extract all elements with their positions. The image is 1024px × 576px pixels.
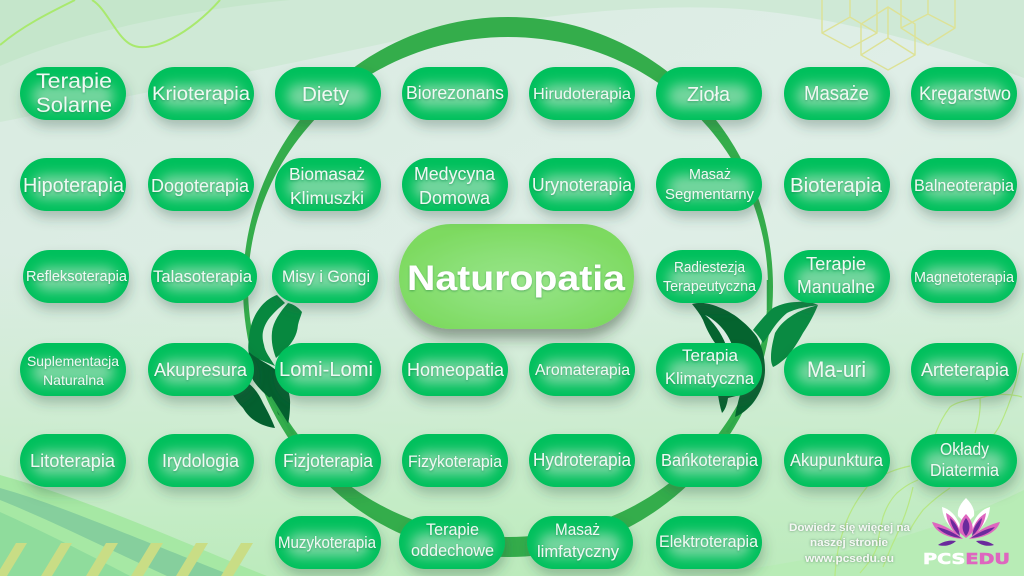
pill: Muzykoterapia: Muzykoterapia [278, 534, 377, 552]
pill: Biomasaż Klimuszki: Klimuszki [290, 188, 364, 208]
pill: Fizykoterapia [402, 434, 508, 487]
pill: Radiestezja Terapeutyczna: Terapeutyczna [663, 279, 757, 295]
pill: Terapie Solarne: Terapie [36, 70, 112, 93]
pill: Krioterapia: Krioterapia [152, 83, 250, 105]
pill: Masaż Segmentarny: Segmentarny [665, 186, 754, 203]
pill: Fizjoterapia [275, 434, 381, 487]
pill: Bioterapia [784, 158, 890, 211]
pill: Homeopatia: Homeopatia [407, 359, 505, 380]
pill: Masaż limfatyczny [527, 516, 633, 569]
pill: Terapie Solarne: Solarne [36, 94, 112, 117]
pill: Homeopatia [402, 343, 508, 396]
pill: Akupunktura: Akupunktura [790, 450, 883, 470]
pill: Lomi-Lomi [275, 343, 381, 396]
right leaves [692, 280, 818, 432]
pill: Refleksoterapia [23, 250, 129, 303]
pill: Elektroterapia: Elektroterapia [659, 532, 759, 551]
pill: Masaż Segmentarny: Masaż [689, 166, 731, 183]
pill: Magnetoterapia: Magnetoterapia [914, 269, 1015, 286]
pill: Biorezonans: Biorezonans [406, 83, 504, 103]
pill: Litoterapia [20, 434, 126, 487]
decorative hexagons [822, 0, 955, 70]
pill: Biorezonans [402, 67, 508, 120]
footer text: Dowiedz się więcej na [789, 522, 911, 534]
pill: Hydroterapia: Hydroterapia [533, 450, 632, 470]
logo wordmark: PCS EDU [923, 550, 1010, 568]
pill: Diety [275, 67, 381, 120]
pill: Bańkoterapia: Bańkoterapia [661, 450, 758, 470]
pill: Masaże: Masaże [804, 83, 869, 105]
pill: Zioła: Zioła [687, 84, 731, 106]
pill: Terapia Klimatyczna: Klimatyczna [665, 369, 755, 388]
leaf vein slit [705, 315, 732, 345]
center pill: Naturopatia [399, 224, 634, 329]
pill: Kręgarstwo [911, 67, 1017, 120]
pill: Terapie Manualne: Terapie [806, 253, 866, 274]
decorative wave line [0, 0, 220, 47]
row 1 pills [20, 67, 1017, 120]
pill: Fizjoterapia: Fizjoterapia [283, 450, 374, 471]
icon: lotus [932, 498, 1000, 546]
pill: Urynoterapia [529, 158, 635, 211]
pill: Terapia Klimatyczna [656, 343, 762, 396]
pill: Irydologia: Irydologia [162, 451, 240, 471]
pill: Misy i Gongi [272, 250, 378, 303]
pill: Magnetoterapia [911, 250, 1017, 303]
pill: Aromaterapia [529, 343, 635, 396]
decorative stripes [0, 543, 253, 576]
footer text [789, 522, 911, 565]
pill: Talasoterapia [151, 250, 257, 303]
pill: Biomasaż Klimuszki: Biomasaż [289, 164, 365, 184]
pill: Okłady Diatermia: Diatermia [930, 460, 999, 480]
pill: Masaż limfatyczny: Masaż [555, 520, 600, 539]
pill: Aromaterapia: Aromaterapia [535, 362, 630, 379]
pill: Elektroterapia [656, 516, 762, 569]
pill: Ma-uri [784, 343, 890, 396]
pill: Suplementacja Naturalna [20, 343, 126, 396]
pill: Zioła [656, 67, 762, 120]
pill: Hipoterapia: Hipoterapia [23, 175, 125, 197]
pill: Hydroterapia [529, 434, 635, 487]
pill: Ma-uri: Ma-uri [807, 357, 866, 382]
footer text: naszej stronie [810, 537, 888, 549]
pill: Okłady Diatermia [911, 434, 1017, 487]
pill: Hirudoterapia: Hirudoterapia [533, 86, 631, 103]
pill: Radiestezja Terapeutyczna [656, 250, 762, 303]
pill: Balneoterapia: Balneoterapia [914, 177, 1015, 195]
pill: Medycyna Domowa: Domowa [419, 188, 491, 208]
pill: Litoterapia: Litoterapia [30, 451, 116, 471]
pill: Masaż limfatyczny: limfatyczny [537, 542, 619, 561]
pill: Masaże [784, 67, 890, 120]
row 4 pills [20, 343, 1017, 396]
pill: Suplementacja Naturalna: Suplementacja [27, 353, 119, 369]
pill: Urynoterapia: Urynoterapia [532, 175, 633, 195]
pill: Fizykoterapia: Fizykoterapia [408, 452, 502, 471]
pill: Hipoterapia [20, 158, 126, 211]
pill: Muzykoterapia [275, 516, 381, 569]
pill: Terapie Manualne [784, 250, 890, 303]
pill: Terapie oddechowe: oddechowe [411, 541, 494, 560]
pill: Medycyna Domowa [402, 158, 508, 211]
pill: Masaż Segmentarny [656, 158, 762, 211]
ring [243, 17, 773, 557]
pill: Diety: Diety [302, 83, 350, 106]
pill: Terapie Solarne [20, 67, 126, 120]
pill: Talasoterapia: Talasoterapia [153, 268, 253, 286]
pill: Terapie oddechowe [399, 516, 505, 569]
pill: Bańkoterapia [656, 434, 762, 487]
pill: Misy i Gongi: Misy i Gongi [282, 267, 370, 286]
pill: Radiestezja Terapeutyczna: Radiestezja [674, 260, 746, 276]
pill: Kręgarstwo: Kręgarstwo [919, 84, 1011, 105]
pill: Okłady Diatermia: Okłady [940, 439, 989, 459]
pill: Hirudoterapia [529, 67, 635, 120]
footer text: www.pcsedu.eu [804, 553, 894, 565]
pill: Terapie Manualne: Manualne [797, 277, 875, 297]
pill: Terapia Klimatyczna: Terapia [682, 346, 739, 365]
pill: Medycyna Domowa: Medycyna [414, 164, 496, 184]
row 2 pills [20, 158, 1017, 211]
pill: Biomasaż Klimuszki [275, 158, 381, 211]
pill: Akupresura [148, 343, 254, 396]
decorative plant lines [835, 353, 1023, 576]
row 5 pills [20, 434, 1017, 487]
pill: Refleksoterapia: Refleksoterapia [26, 269, 128, 285]
pill: Suplementacja Naturalna: Naturalna [43, 372, 104, 388]
row 6 pills [275, 516, 762, 569]
logo: lotus PCSEDU [923, 498, 1010, 568]
pill: Irydologia [148, 434, 254, 487]
pill: Lomi-Lomi: Lomi-Lomi [279, 359, 373, 381]
row 3 pills [23, 250, 1017, 303]
pill: Balneoterapia [911, 158, 1017, 211]
pill: Krioterapia [148, 67, 254, 120]
left leaves [233, 295, 302, 434]
pill: Dogoterapia: Dogoterapia [151, 175, 250, 196]
pill: Terapie oddechowe: Terapie [426, 520, 479, 539]
pill: Akupunktura [784, 434, 890, 487]
pill: Arteterapia: Arteterapia [921, 360, 1010, 380]
pill: Akupresura: Akupresura [154, 360, 248, 380]
pill: Dogoterapia [148, 158, 254, 211]
center pill: Naturopatia: Naturopatia [407, 259, 626, 298]
pill: Bioterapia: Bioterapia [790, 175, 883, 197]
pill: Arteterapia [911, 343, 1017, 396]
